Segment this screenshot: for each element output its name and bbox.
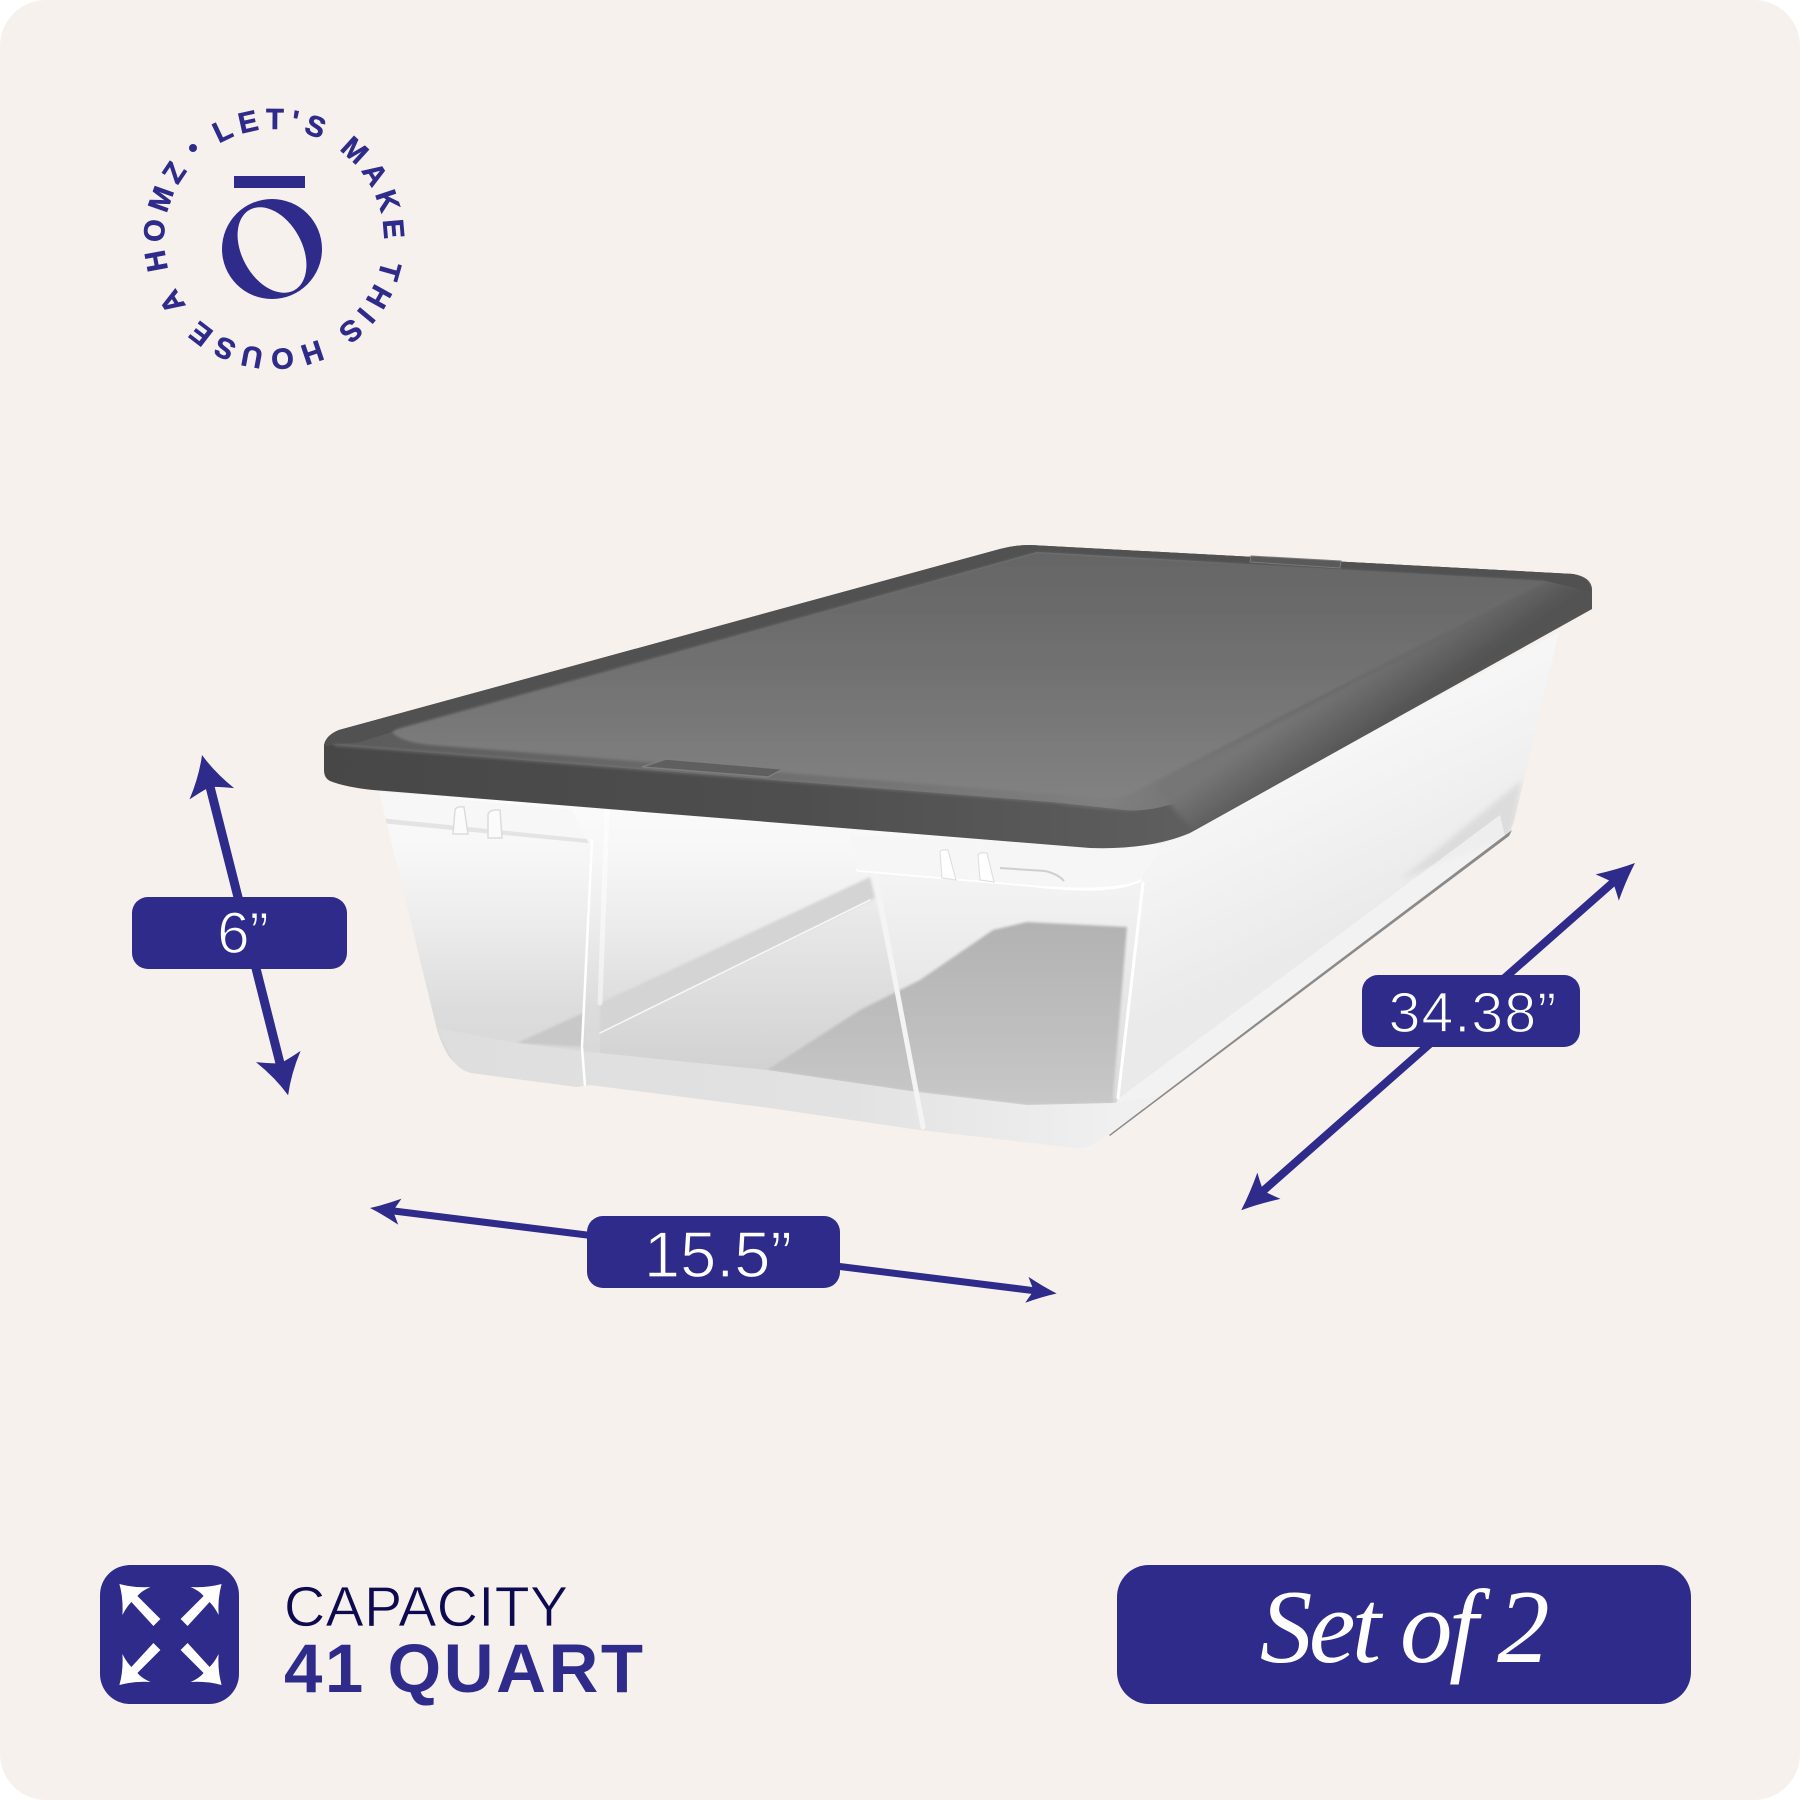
front wall bbox=[387, 793, 1160, 1105]
capacity label: CAPACITY bbox=[284, 1575, 568, 1639]
set of 2 badge: Set of 2 bbox=[1260, 1568, 1548, 1685]
lid rim top surface bbox=[325, 545, 1592, 810]
logo letter o with macron bbox=[222, 176, 322, 305]
capacity value: 41 QUART bbox=[284, 1630, 643, 1707]
lid right rim bbox=[1155, 581, 1600, 832]
embossed label front bbox=[642, 759, 783, 777]
lid face top highlight bbox=[334, 745, 1171, 810]
bottom lip band bbox=[456, 1044, 1116, 1148]
seams and glare lines bbox=[582, 813, 1143, 1127]
lid bbox=[324, 545, 1600, 848]
height arrow bbox=[180, 749, 310, 1101]
left panel triangle shadow bbox=[517, 1013, 583, 1047]
box bottom right shadow line bbox=[1109, 830, 1512, 1136]
length label: 34.38” bbox=[1389, 981, 1557, 1045]
length label bbox=[1362, 975, 1580, 1047]
middle panel lower region bbox=[600, 898, 925, 1127]
width label: 15.5” bbox=[644, 1218, 792, 1291]
right wall lower grey wedge bbox=[1411, 784, 1520, 874]
lid back rim bbox=[325, 545, 1592, 746]
brand logo badge bbox=[144, 108, 405, 370]
right panel bbox=[1118, 992, 1128, 1057]
interior grey shadow bbox=[767, 922, 1127, 1105]
capacity block bbox=[100, 1565, 643, 1707]
width arrow bbox=[368, 1195, 1058, 1306]
middle panel diagonal strip bbox=[602, 877, 875, 1008]
height label bbox=[132, 897, 347, 969]
left handle bbox=[386, 806, 588, 843]
height label: 6” bbox=[217, 901, 269, 966]
box body bbox=[379, 632, 1559, 1150]
storage box product bbox=[324, 545, 1600, 1150]
set of 2 badge bbox=[1117, 1565, 1691, 1704]
lid recessed panel bbox=[392, 552, 1546, 798]
right wall white lip bbox=[1418, 815, 1505, 876]
icon: expand arrows bbox=[100, 1565, 239, 1704]
lid outer shape bbox=[324, 545, 1592, 848]
right side wall bbox=[1120, 632, 1558, 1098]
logo circular slogan: LET'S MAKE THIS HOUSE A HOMZ bbox=[144, 108, 405, 370]
width label bbox=[587, 1216, 840, 1291]
length arrow bbox=[1230, 850, 1647, 1223]
embossed label back bbox=[1250, 556, 1341, 568]
right handle bbox=[858, 849, 1140, 888]
